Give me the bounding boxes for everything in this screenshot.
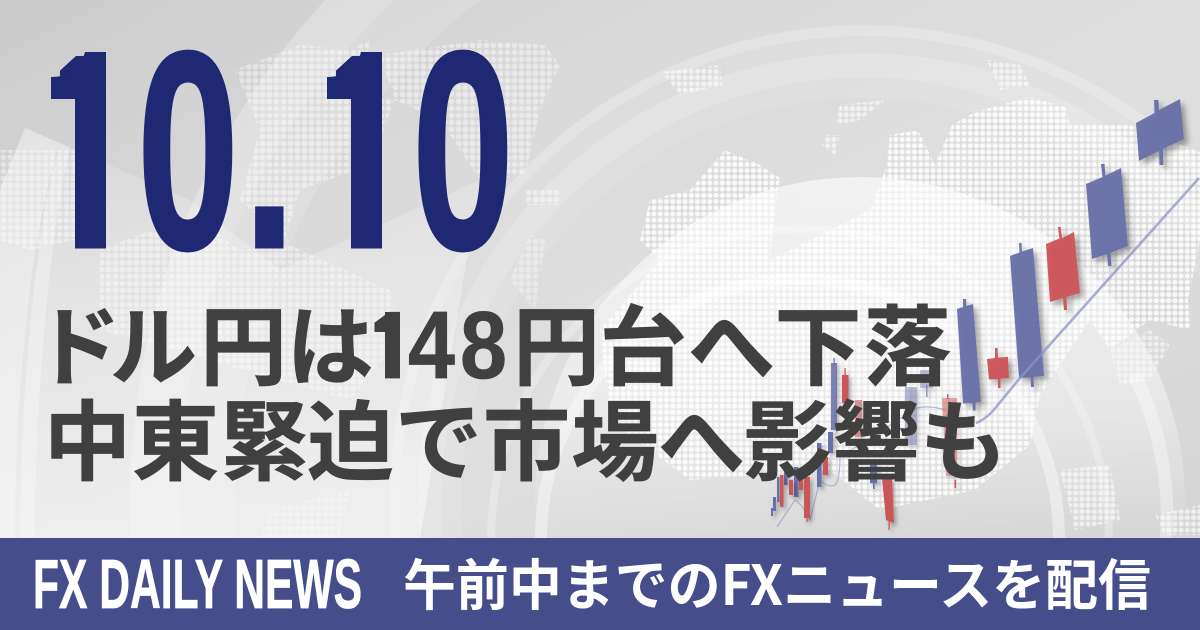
footer bar xyxy=(0,538,1200,630)
date heading: 0 xyxy=(412,0,514,309)
moving average line xyxy=(976,178,1199,423)
date heading: 1 xyxy=(306,0,418,310)
small candlestick chart xyxy=(771,358,957,530)
candle: red large xyxy=(1046,227,1080,310)
small red candles xyxy=(780,368,957,530)
candle: blue large xyxy=(1010,243,1044,387)
small blue candles xyxy=(771,358,933,516)
date heading: . xyxy=(242,0,297,310)
trend line: small chart xyxy=(777,407,945,527)
headline line 1 digits: 1 xyxy=(369,292,416,399)
headline line 2: 中東緊迫で市場へ影響も xyxy=(44,373,1007,499)
dotted world map xyxy=(0,40,1200,538)
headline: 8 xyxy=(460,292,507,399)
headline line 1 text: 円台へ下落 xyxy=(513,278,951,404)
map: left continents xyxy=(0,40,560,538)
footer label: FX DAILY NEWS xyxy=(33,545,362,623)
candle: blue top xyxy=(1136,99,1184,165)
date heading xyxy=(51,50,508,252)
map: arctic islands xyxy=(662,60,1030,155)
headline line 1 text: ドル円は xyxy=(34,278,374,404)
candle: blue upper xyxy=(1086,164,1128,266)
date heading: 1 xyxy=(30,0,142,310)
date heading: 0 xyxy=(137,0,239,309)
map: right continents xyxy=(600,97,1200,535)
headline xyxy=(51,302,998,482)
footer description: 午前中までのFXニュースを配信 xyxy=(403,541,1151,621)
candle: red small xyxy=(987,348,1009,388)
large candlestick chart xyxy=(957,99,1199,423)
headline: 4 xyxy=(408,292,455,399)
candle: blue tall xyxy=(957,299,981,410)
